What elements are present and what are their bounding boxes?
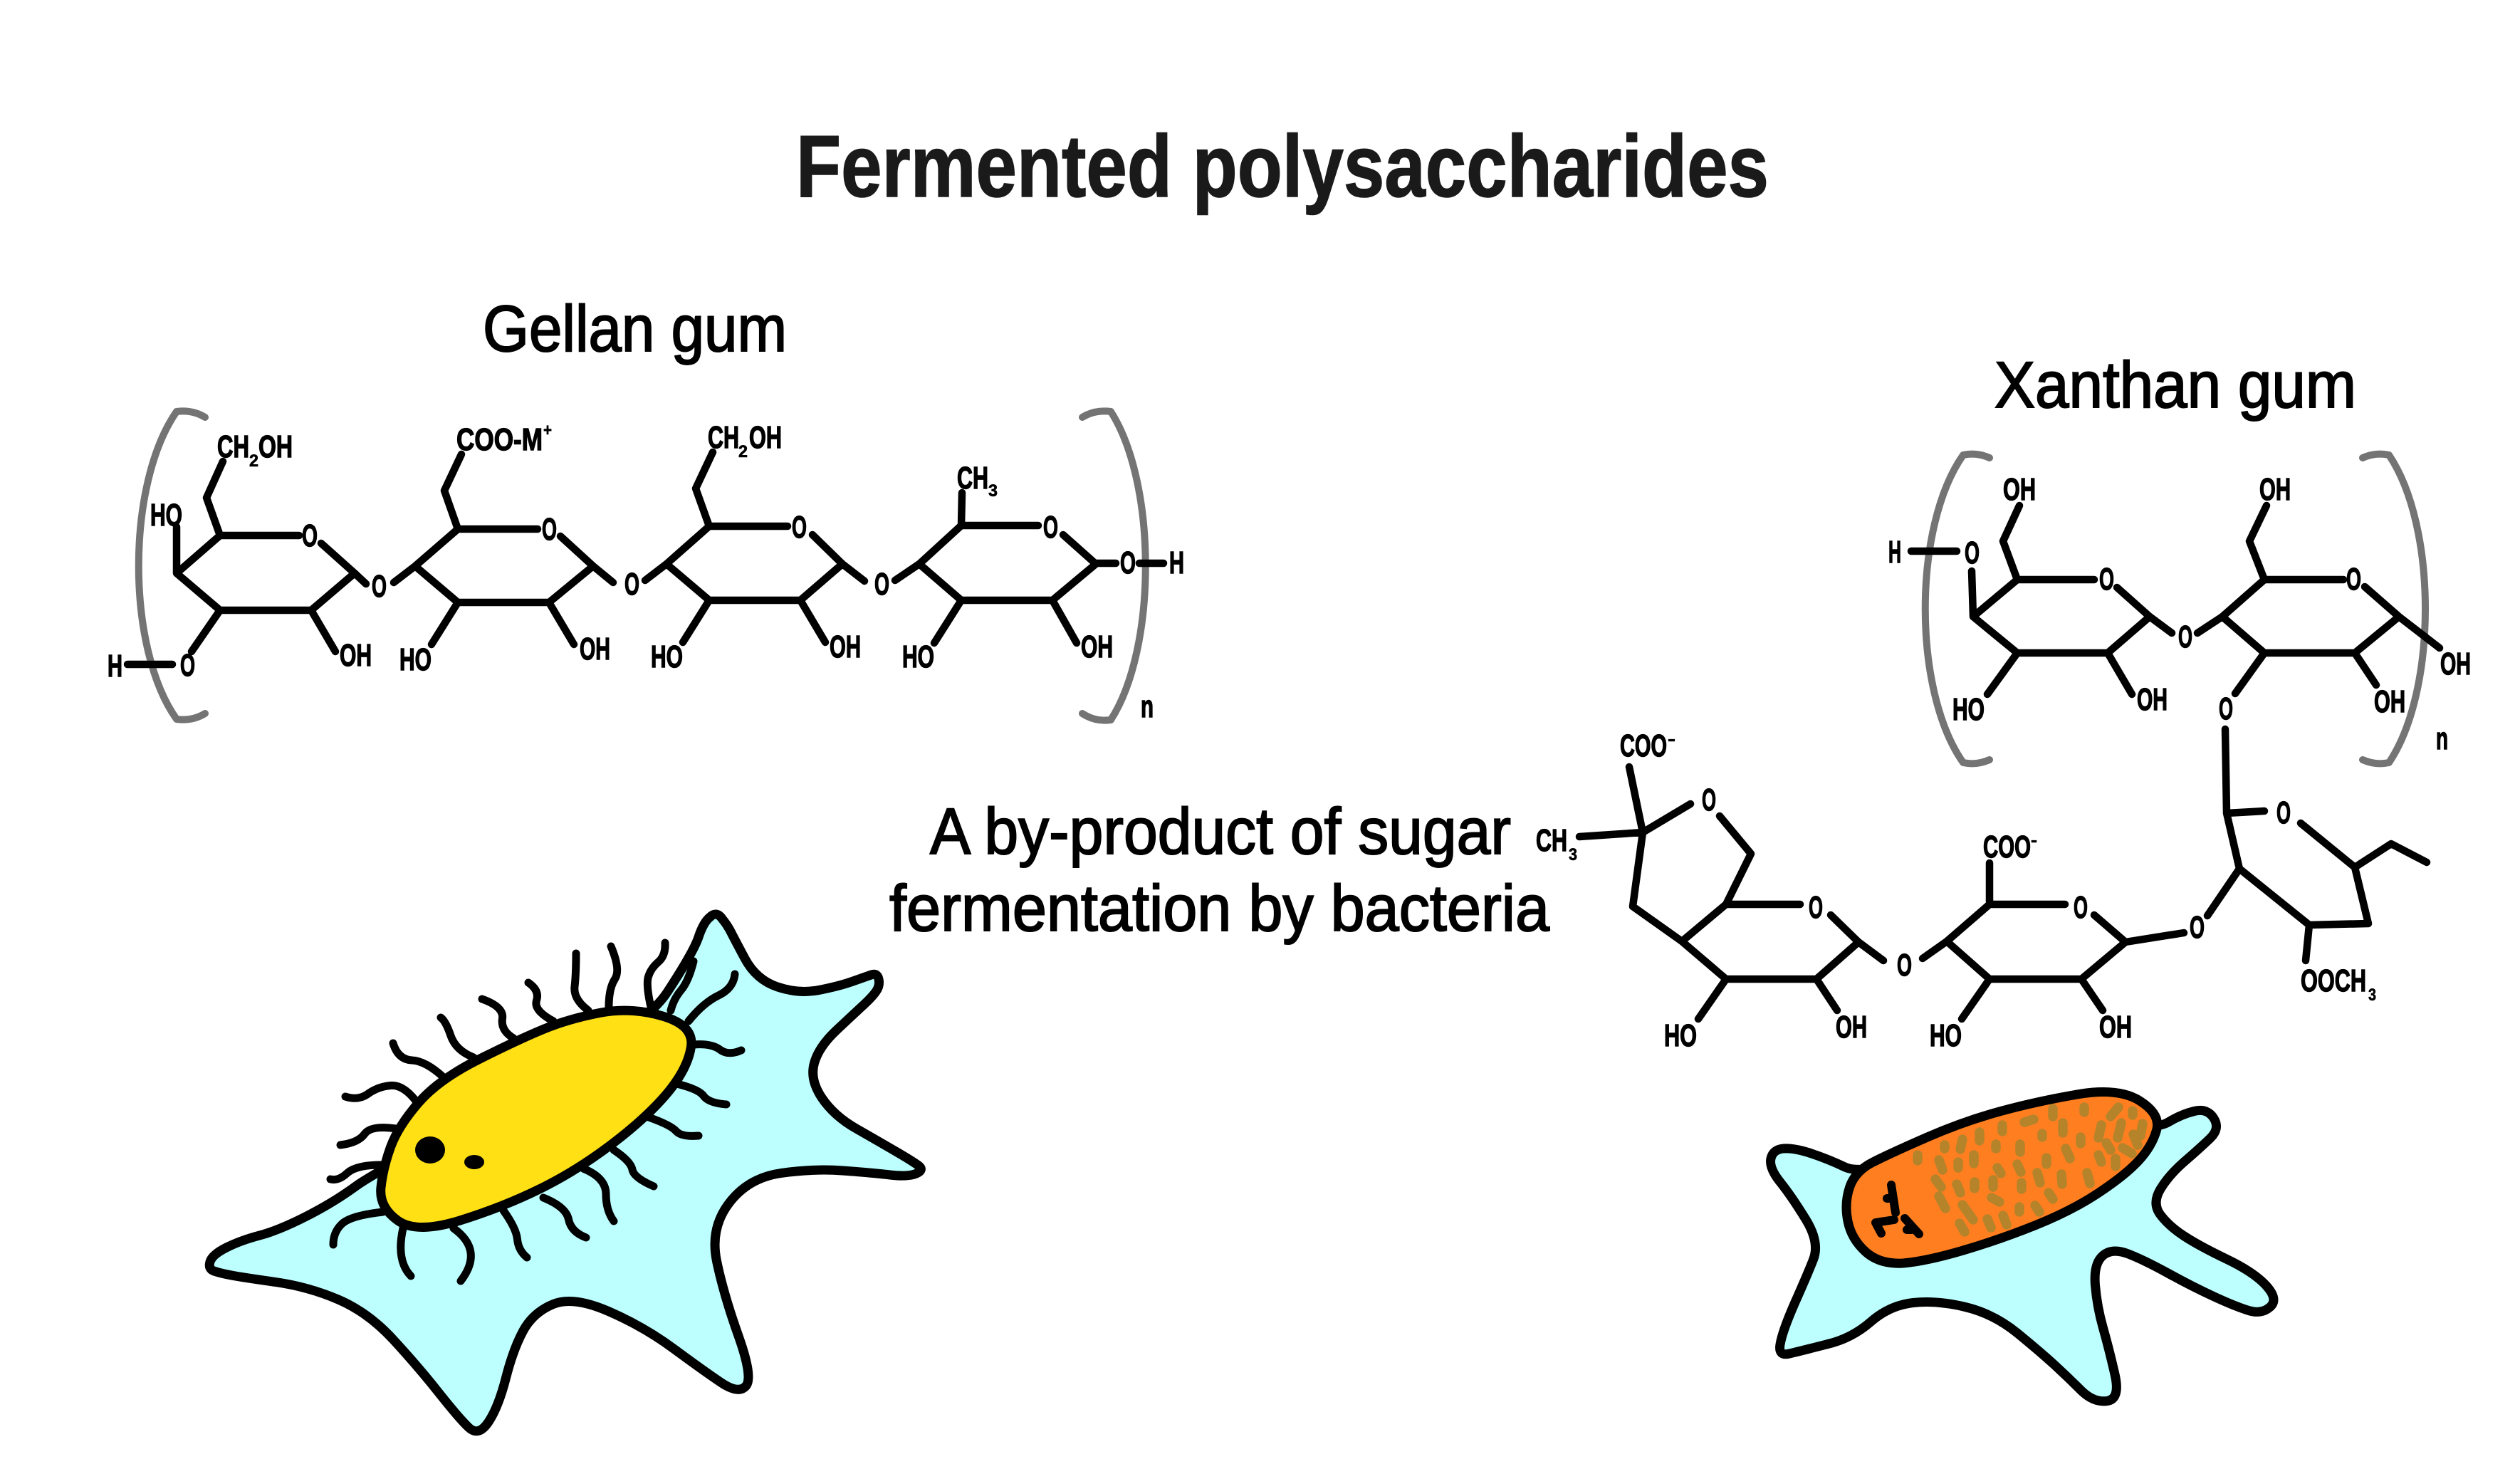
nucleoid marks [1876,1185,1919,1234]
xanthan atom labels: O [1965,535,1980,570]
text block: by-product description: fermentation by bacteria [889,872,1550,945]
gellan atom labels: O [1043,510,1058,545]
xanthan atom labels [1536,472,2471,1053]
xanthan bonds [1579,506,2440,1019]
xanthan atom labels: OH [2137,682,2168,717]
gellan atom labels: O [792,510,807,545]
xanthan atom labels: HO [1930,1018,1962,1053]
gellan atom labels: n [1141,689,1154,724]
gellan atom labels: H [1169,545,1184,580]
heading: Xanthan gum: Xanthan gum [1994,349,2356,422]
xanthan atom labels: 3 [2368,985,2376,1005]
intracellular granules [1918,1107,2143,1232]
gellan atom labels: OH [580,632,610,666]
xanthan atom labels: COO [1983,830,2031,864]
xanthan atom labels: OH [2099,1010,2132,1045]
gellan atom labels: O [542,512,557,547]
chemical structure: xanthan gum [1536,454,2471,1053]
xanthan atom labels: OH [1836,1010,1867,1045]
gellan atom labels: HO [150,498,182,533]
title: Fermented polysaccharides [796,118,1769,216]
repeat-unit brackets [1925,454,2425,763]
illustration: orange bacterium with gel [1771,1092,2274,1401]
xanthan atom labels: n [2436,721,2448,756]
xanthan atom labels: - [2031,831,2037,850]
xanthan atom labels: H [1888,535,1901,570]
gellan atom labels: CH [957,461,988,496]
gellan atom labels: HO [902,639,934,674]
gellan atom labels: H [108,649,122,684]
xanthan atom labels: O [2219,691,2233,726]
gellan bonds [127,452,1164,664]
gel blob [1771,1110,2274,1401]
xanthan atom labels: OOCH [2301,963,2366,998]
gellan atom labels: OH [1081,629,1113,664]
xanthan atom labels: OH [2003,472,2036,507]
nucleoid spots [415,1136,484,1169]
gellan atom labels: CH [217,429,249,464]
xanthan atom labels: COO [1620,728,1667,763]
xanthan atom labels: 3 [1569,845,1577,864]
gellan atom labels: 3 [988,481,998,501]
illustration: yellow bacterium with gel [209,914,921,1431]
gellan atom labels: + [543,421,552,440]
repeat-unit brackets [139,411,1146,721]
yellow cell body [381,1010,691,1228]
xanthan atom labels: O [2099,562,2114,597]
xanthan atom labels: O [1702,783,1716,817]
xanthan atom labels: HO [1664,1018,1697,1053]
xanthan atom labels: OH [2440,647,2471,681]
xanthan atom labels: O [2190,910,2205,945]
xanthan atom labels: - [1668,730,1675,749]
gellan atom labels: HO [651,639,683,674]
gellan atom labels: O [180,648,195,683]
xanthan atom labels: O [2074,890,2088,925]
text block: by-product description: A by-product of sugar [930,795,1511,868]
gellan atom labels: OH [830,629,861,664]
xanthan atom labels: CH [1536,823,1567,858]
gellan atom labels: 2 [738,442,748,461]
gellan atom labels: HO [399,642,432,677]
gellan atom labels: CH [708,420,739,455]
gel blob [209,914,921,1431]
heading: Gellan gum: Gellan gum [483,293,787,365]
gellan atom labels: COO-M [456,422,543,457]
xanthan atom labels: OH [2259,472,2291,507]
gellan atom labels: O [372,569,387,604]
gellan atom labels: O [624,567,639,602]
xanthan atom labels: O [2276,795,2291,830]
gellan atom labels: OH [749,420,782,455]
gellan atom labels: OH [258,429,293,464]
gellan atom labels: 2 [249,451,258,471]
gellan atom labels [108,420,1184,724]
text block: by-product description [889,795,1550,945]
gellan atom labels: OH [340,638,372,673]
chemical structure: gellan gum [108,411,1184,724]
gellan atom labels: O [874,567,889,602]
gellan atom labels: O [1120,545,1136,580]
flagella [330,943,741,1281]
xanthan atom labels: O [1897,948,1912,983]
xanthan atom labels: O [2178,619,2192,654]
xanthan atom labels: OH [2374,684,2405,719]
gellan atom labels: O [302,518,318,553]
orange cell body [1846,1092,2158,1263]
xanthan atom labels: HO [1952,692,1985,727]
xanthan atom labels: O [2346,562,2361,597]
xanthan atom labels: O [1809,890,1823,925]
